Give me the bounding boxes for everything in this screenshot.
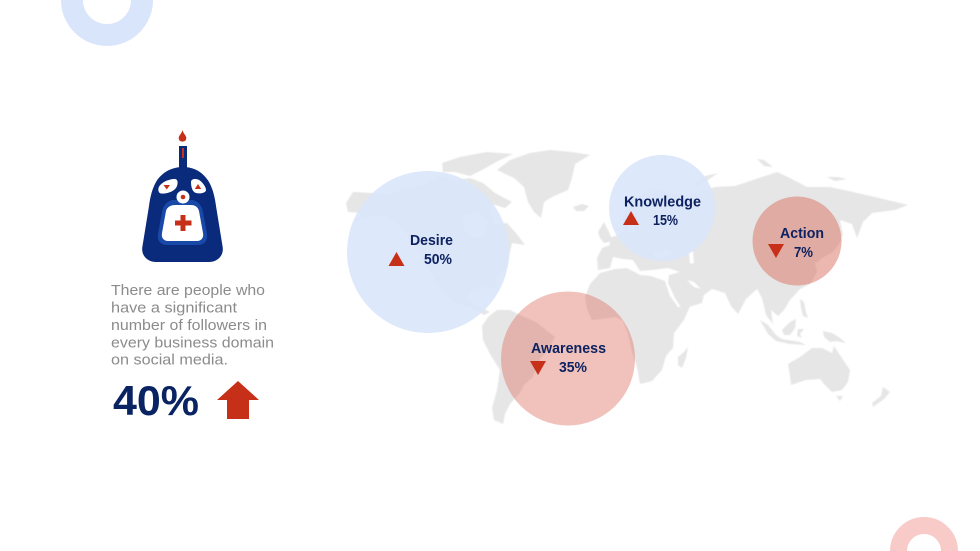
inland seas — [462, 212, 701, 289]
Australia — [788, 346, 850, 392]
decorative ring: bottom right — [898, 526, 950, 551]
bubble: Knowledge: 15% — [653, 212, 678, 229]
Iceland — [573, 204, 589, 211]
bubble: Awareness: 35% — [559, 359, 587, 376]
text block: description: There are people who — [111, 282, 265, 299]
bubble: Desire — [347, 171, 509, 333]
bubble: Desire: 50% — [424, 251, 452, 268]
bubble: Knowledge: Knowledge — [624, 194, 701, 210]
Africa — [585, 268, 690, 384]
icon: glucose meter with blood drop — [142, 130, 223, 262]
text block: description: number of followers in — [111, 317, 267, 334]
Eurasia — [597, 172, 908, 324]
Philippines — [800, 299, 808, 318]
bubble: Action: 7% — [794, 244, 813, 261]
United Kingdom — [598, 222, 613, 243]
Madagascar — [678, 347, 688, 368]
bubble: Action: Action — [780, 225, 824, 242]
North America — [346, 176, 525, 315]
Sumatra and Java — [760, 320, 806, 345]
bubble: Action — [752, 196, 842, 286]
bubble: Awareness: Awareness — [531, 340, 606, 357]
Greenland — [497, 150, 590, 218]
Sulawesi — [797, 329, 804, 338]
Tasmania — [836, 396, 843, 401]
bubble: Knowledge — [609, 155, 715, 261]
text block: description: have a significant — [111, 300, 238, 316]
icon: large up arrow — [217, 381, 259, 419]
text block: description: on social media. — [111, 352, 228, 368]
Arctic Russian islands — [693, 159, 847, 186]
Borneo — [782, 319, 796, 335]
text block: description — [111, 282, 274, 368]
bubble: Awareness — [501, 292, 635, 426]
South America — [482, 310, 555, 424]
New Guinea — [823, 331, 846, 343]
decorative ring: top left — [72, 0, 142, 35]
text block: description: every business domain — [111, 334, 274, 352]
world map — [346, 150, 908, 424]
Japan — [815, 232, 842, 263]
bubble: Desire: Desire — [410, 232, 453, 249]
headline number: 40%: 40% — [113, 377, 199, 424]
New Zealand — [872, 387, 890, 407]
Arctic islands — [442, 152, 513, 176]
